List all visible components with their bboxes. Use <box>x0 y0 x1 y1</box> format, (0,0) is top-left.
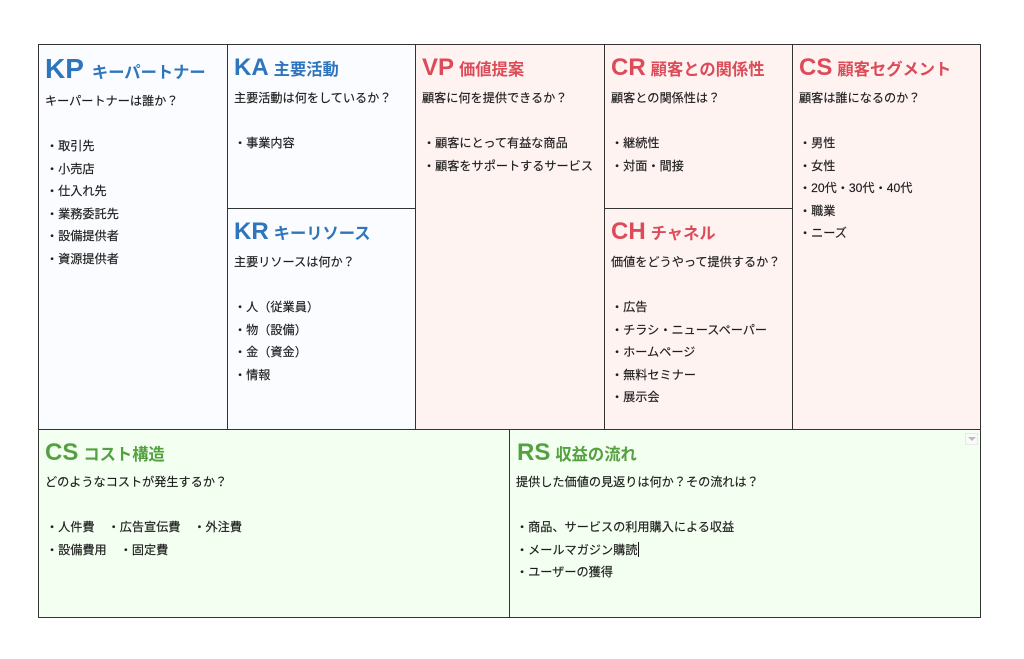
list: cost structure: ・人件費 ・広告宣伝費 ・外注費 <box>46 520 242 534</box>
list: KR: ・金（資金） <box>234 345 307 359</box>
question: KA: 主要活動は何をしているか？ <box>234 91 391 105</box>
list: cost structure <box>46 520 242 556</box>
heading: KA: KA 主要活動 <box>234 54 339 81</box>
panel: key resources <box>227 208 416 430</box>
list: KP <box>46 139 119 266</box>
list: customer segments: ・20代・30代・40代 <box>799 181 912 195</box>
list: CH: ・展示会 <box>611 390 660 404</box>
list: customer segments <box>799 136 912 240</box>
list: RS: ・商品、サービスの利用購入による収益 <box>516 520 734 534</box>
heading: KR: KR キーリソース <box>234 218 371 245</box>
list: RS: ・ユーザーの獲得 <box>516 565 613 579</box>
list: CR: ・継続性 <box>611 136 660 150</box>
question: RS: 提供した価値の見返りは何か？その流れは？ <box>516 475 759 489</box>
list: CH: ・無料セミナー <box>611 368 696 382</box>
list: customer segments: ・職業 <box>799 204 835 218</box>
list: CR <box>611 136 684 172</box>
question: CR: 顧客との関係性は？ <box>611 91 720 105</box>
list: KP: ・業務委託先 <box>46 206 119 220</box>
list: cost structure: ・設備費用 ・固定費 <box>46 542 168 556</box>
list: CR: ・対面・間接 <box>611 158 684 172</box>
list: customer segments: ・ニーズ <box>799 226 847 240</box>
panel: value proposition <box>415 44 605 430</box>
heading: CR: CR 顧客との関係性 <box>611 54 764 81</box>
panel: customer segments <box>792 44 981 430</box>
list: CH: ・ホームページ <box>611 345 695 359</box>
heading: VP: VP 価値提案 <box>422 54 524 81</box>
list: RS <box>516 520 734 579</box>
list: KP: ・設備提供者 <box>46 229 119 243</box>
question: KR: 主要リソースは何か？ <box>234 255 355 269</box>
heading: cost structure: CS コスト構造 <box>45 439 165 466</box>
list: KP: ・取引先 <box>46 139 95 153</box>
question: cost structure: どのようなコストが発生するか？ <box>45 475 227 489</box>
list: KR: ・情報 <box>234 368 270 382</box>
list: VP: ・顧客をサポートするサービス <box>423 158 593 172</box>
list: customer segments: ・女性 <box>799 158 835 172</box>
heading: customer segments: CS 顧客セグメント <box>799 54 951 81</box>
list: KP: ・小売店 <box>46 162 95 176</box>
panel: key partners <box>38 44 228 430</box>
heading: KP: KP キーパートナー <box>45 53 206 84</box>
question: customer segments: 顧客は誰になるのか？ <box>799 91 920 105</box>
list: KR: ・物（設備） <box>234 322 307 336</box>
list: KP: ・資源提供者 <box>46 252 119 266</box>
list: VP <box>423 136 593 172</box>
panel: key activities <box>227 44 416 209</box>
list: CH: ・チラシ・ニュースペーパー <box>611 322 767 336</box>
question: CH: 価値をどうやって提供するか？ <box>611 255 780 269</box>
panel: revenue streams <box>509 429 981 618</box>
heading: CH: CH チャネル <box>611 218 716 245</box>
list: CH <box>611 300 767 404</box>
list: RS: ・メールマガジン購読 <box>516 542 637 556</box>
list: CH: ・広告 <box>611 300 647 314</box>
question: KP: キーパートナーは誰か？ <box>45 94 178 108</box>
panel: cost structure <box>38 429 510 618</box>
icon: dropdown toggle <box>965 433 978 445</box>
list: KP: ・仕入れ先 <box>46 184 107 198</box>
list: VP: ・顧客にとって有益な商品 <box>423 136 568 150</box>
question: VP: 顧客に何を提供できるか？ <box>422 91 567 105</box>
panel: customer relationships <box>604 44 793 209</box>
list: KA: ・事業内容 <box>234 136 295 150</box>
list: KR: ・人（従業員） <box>234 300 319 314</box>
heading: RS: RS 収益の流れ <box>517 439 637 466</box>
panel: channels <box>604 208 793 430</box>
list: customer segments: ・男性 <box>799 136 835 150</box>
list: KR <box>234 300 319 382</box>
